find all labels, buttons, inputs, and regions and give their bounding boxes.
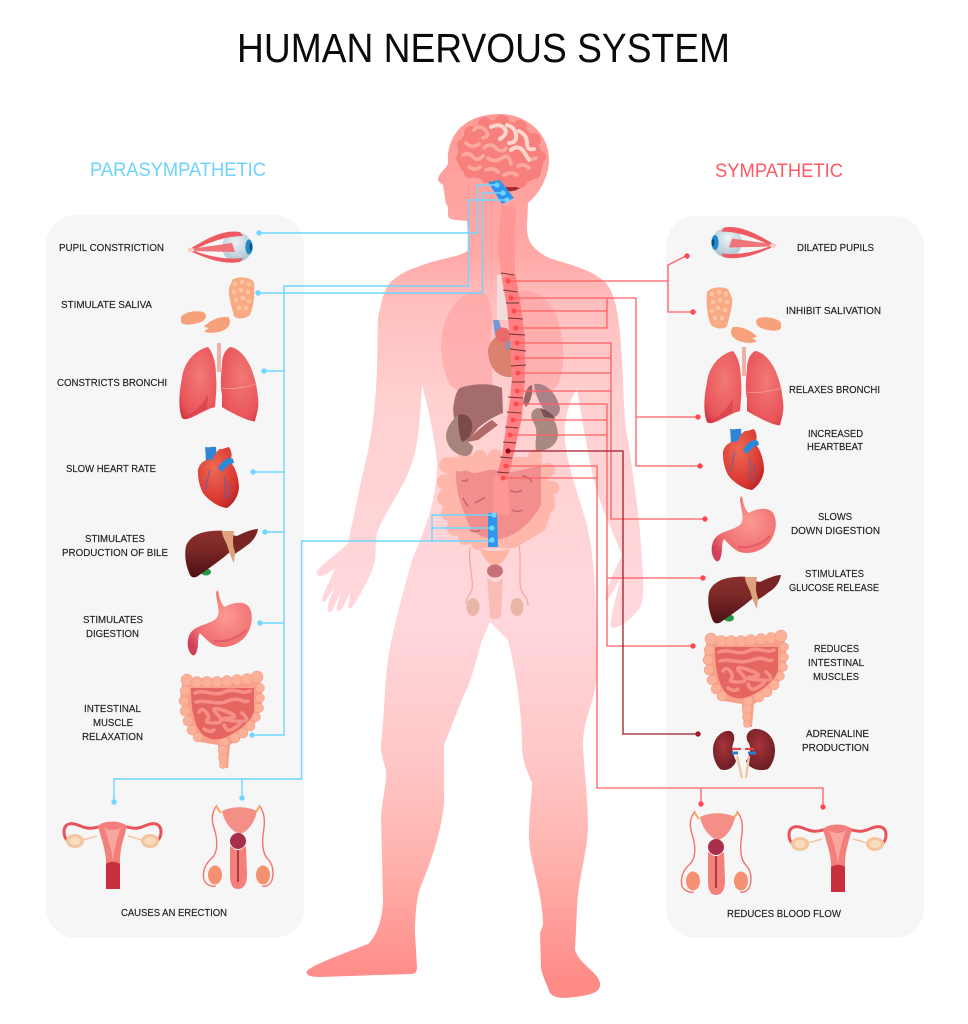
- label: slows down digestion: [791, 512, 880, 537]
- icon: liver: [185, 529, 258, 577]
- cervical nerve band: [488, 180, 514, 204]
- panel: sympathetic: [666, 216, 924, 938]
- icon: intestines: [703, 630, 788, 728]
- inner lungs: [441, 291, 563, 395]
- label: inhibit salivation: INHIBIT SALIVATION: [786, 306, 881, 317]
- icon: liver: [708, 575, 781, 623]
- icon: female reproductive organs: [64, 822, 161, 889]
- label: slows down digestion: SLOWS: [818, 512, 852, 523]
- label: relaxes bronchi: RELAXES BRONCHI: [789, 385, 880, 396]
- label: stimulates digestion: DIGESTION: [86, 629, 139, 640]
- brain: [456, 115, 546, 191]
- label: reduces blood flow: REDUCES BLOOD FLOW: [727, 909, 841, 920]
- label: stimulates glucose release: [789, 569, 879, 594]
- label: intestinal muscle relaxation: [82, 704, 143, 743]
- human body figure: [307, 114, 643, 998]
- icon: eye: [188, 231, 253, 263]
- label: stimulates digestion: STIMULATES: [83, 615, 143, 626]
- inner liver and kidneys: [446, 384, 560, 456]
- inner large intestine: [437, 449, 559, 550]
- icon: stomach: [712, 496, 776, 561]
- panel: parasympathetic: [46, 215, 304, 938]
- label: dilated pupils: DILATED PUPILS: [797, 243, 874, 254]
- icon: male reproductive organs: [203, 805, 273, 889]
- label: adrenaline production: ADRENALINE: [806, 729, 869, 740]
- label: causes an erection: CAUSES AN ERECTION: [121, 908, 227, 919]
- label: increased heartbeat: [807, 429, 864, 453]
- label: adrenaline production: PRODUCTION: [802, 743, 869, 754]
- icon: intestines: [179, 671, 264, 768]
- label: reduces intestinal muscles: [808, 644, 864, 683]
- label: pupil constriction: PUPIL CONSTRICTION: [59, 243, 164, 254]
- label: stimulates glucose release: GLUCOSE RELEASE: [789, 583, 879, 594]
- label: stimulates production of bile: [62, 534, 168, 559]
- label: intestinal muscle relaxation: INTESTINAL: [84, 704, 141, 715]
- icon: heart: [198, 447, 239, 508]
- label: increased heartbeat: HEARTBEAT: [807, 442, 864, 453]
- spine: [493, 205, 526, 515]
- label: reduces intestinal muscles: INTESTINAL: [808, 658, 864, 669]
- icon: salivary glands: [181, 277, 254, 333]
- label: stimulates glucose release: STIMULATES: [805, 569, 864, 580]
- label: stimulate saliva: STIMULATE SALIVA: [61, 300, 152, 311]
- label: stimulates production of bile: PRODUCTION OF BILE: [62, 548, 168, 559]
- icon: lungs: [704, 347, 783, 425]
- label: slow heart rate: SLOW HEART RATE: [66, 464, 156, 475]
- icon: lungs: [179, 343, 258, 421]
- label: adrenaline production: [802, 729, 869, 754]
- icon: heart: [723, 429, 764, 490]
- inner airway: [497, 275, 508, 320]
- label: constricts bronchi: CONSTRICTS BRONCHI: [57, 378, 167, 389]
- label: reduces intestinal muscles: MUSCLES: [813, 672, 859, 683]
- heading: sympathetic: SYMPATHETIC: [715, 160, 843, 182]
- label: reduces intestinal muscles: REDUCES: [814, 644, 859, 655]
- heading: parasympathetic: PARASYMPATHETIC: [90, 159, 266, 181]
- label: slows down digestion: DOWN DIGESTION: [791, 526, 880, 537]
- label: intestinal muscle relaxation: MUSCLE: [93, 718, 133, 729]
- icon: female reproductive organs: [789, 824, 886, 892]
- inner pelvic organs: [466, 545, 528, 619]
- title: HUMAN NERVOUS SYSTEM: [237, 25, 730, 71]
- label: intestinal muscle relaxation: RELAXATION: [82, 732, 143, 743]
- inner heart: [488, 320, 513, 377]
- sacral nerve band: [488, 512, 498, 547]
- label: stimulates production of bile: STIMULATES: [85, 534, 145, 545]
- label: stimulates digestion: [83, 615, 143, 640]
- icon: male reproductive organs: [681, 811, 751, 895]
- inner small intestine: [456, 466, 541, 539]
- icon: stomach: [188, 590, 252, 655]
- icon: kidneys: [713, 729, 775, 778]
- icon: salivary glands: [707, 287, 781, 343]
- body silhouette: [307, 114, 643, 998]
- label: increased heartbeat: INCREASED: [808, 429, 863, 440]
- connectors: sympathetic (red): [500, 253, 826, 810]
- connectors: parasympathetic (blue): [111, 185, 507, 805]
- icon: eye: [711, 227, 776, 258]
